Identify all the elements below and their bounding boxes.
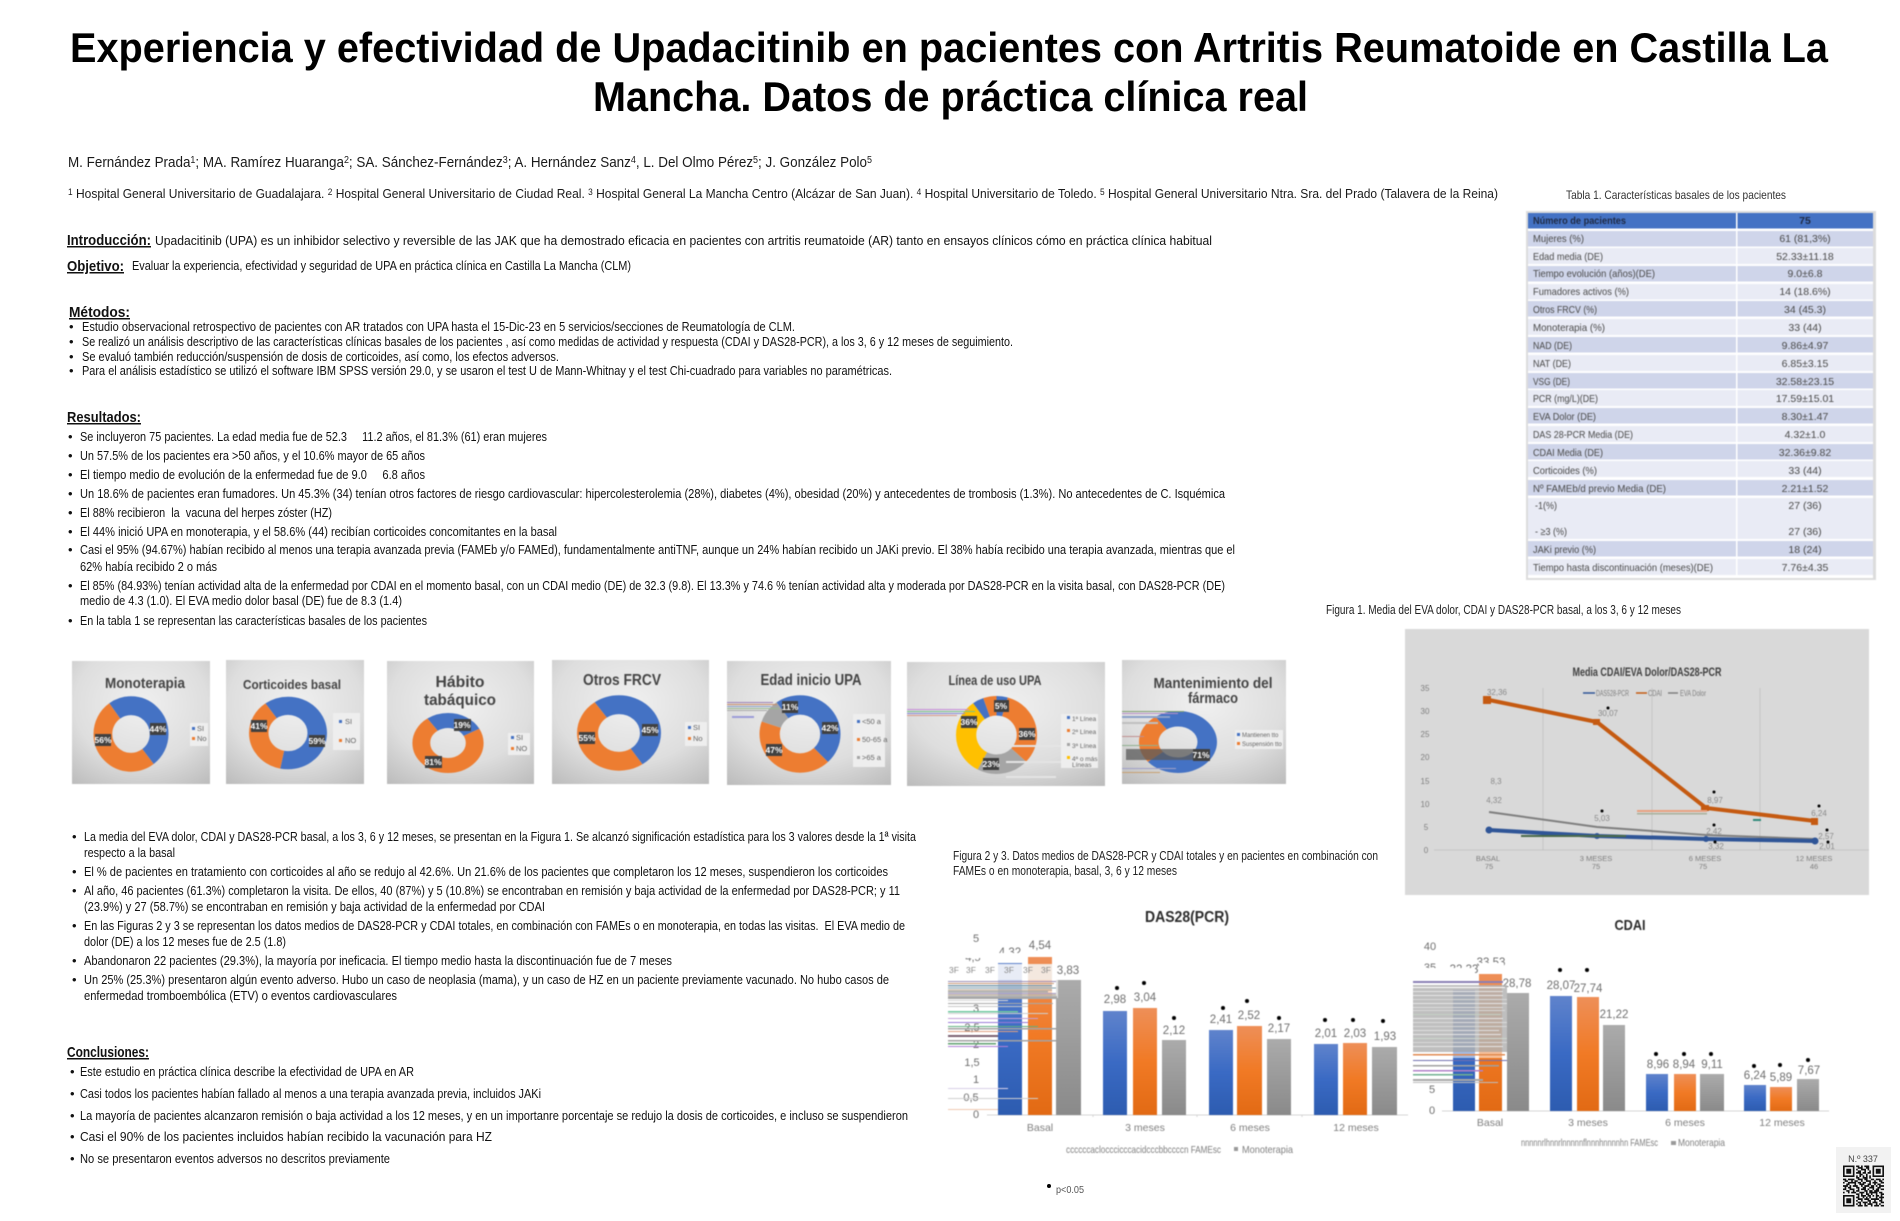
figure 2: DAS28 PCR bar chart: 2,17 — [1268, 1023, 1290, 1035]
introduction: Upadacitinib (UPA) es un inhibidor selectivo y reversible de las JAK que ha demostrado eficacia en pacientes con artritis reumatoide (AR) tanto en ensayos clínicos cómo en práctica clínica habitual — [155, 233, 1212, 248]
figure 1: line chart: 75 — [1592, 862, 1600, 871]
figure 2: DAS28 PCR bar chart: 3,83 — [1057, 965, 1079, 977]
figure 3: CDAI bar chart: 35 — [1424, 962, 1436, 974]
figure 2: DAS28 PCR bar chart: 2 — [973, 1039, 979, 1051]
figure 3: CDAI bar chart: 6,24 — [1744, 1070, 1767, 1082]
results text part 2: • — [72, 883, 77, 898]
figure 1: line chart: 2,42 — [1706, 827, 1722, 836]
table 1: baseline characteristics: Mujeres (%) — [1533, 233, 1584, 245]
figure 1 caption: Figura 1. Media del EVA dolor, CDAI y DAS28-PCR basal, a los 3, 6 y 12 meses — [1326, 603, 1681, 617]
figure 1: line chart: 20 — [1421, 753, 1430, 762]
figure 3: CDAI bar chart: 5,89 — [1770, 1072, 1792, 1084]
results text part 2: La media del EVA dolor, CDAI y DAS28-PCR basal, a los 3, 6 y 12 meses, se presentan en la Figura 1. Se alcanzó significación estadística para los 3 valores desde la 1ª visita — [84, 829, 917, 844]
donut chart: Línea de uso UPA: 36% — [960, 717, 978, 727]
figure 2 and 3 caption: FAMEs o en monoterapia, basal, 3, 6 y 12 meses — [953, 864, 1177, 878]
poster number and QR code — [1836, 1147, 1891, 1213]
results text part 1: 62% había recibido 2 o más — [80, 559, 217, 574]
results text part 2: Al año, 46 pacientes (61.3%) completaron la visita. De ellos, 40 (87%) y 5 (10.8%) se encontraban en remisión y baja actividad de la enfermedad por DAS28-PCR; y 11 — [84, 883, 900, 898]
figure 2: DAS28 PCR bar chart: 1,5 — [964, 1057, 980, 1069]
table 1: baseline characteristics: 8.30±1.47 — [1782, 411, 1828, 423]
donut chart: Línea de uso UPA: 3ª Línea — [1072, 743, 1096, 750]
table 1: baseline characteristics: 2.21±1.52 — [1782, 483, 1828, 495]
results text part 2: (23.9%) y 27 (58.7%) se encontraban en remisión y baja actividad de la enfermedad por CDAI — [84, 899, 545, 914]
table 1: baseline characteristics: 7.76±4.35 — [1782, 562, 1828, 574]
table 1: baseline characteristics: 75 — [1799, 215, 1811, 227]
results text part 1: • — [68, 448, 73, 463]
conclusions: Conclusiones: — [67, 1044, 149, 1061]
results text part 2: dolor (DE) a los 12 meses fue de 2.5 (1.8) — [84, 934, 286, 949]
figure 1: line chart: 0 — [1424, 846, 1429, 855]
results text part 1: • — [68, 486, 73, 501]
table 1: baseline characteristics: 34 (45.3) — [1784, 304, 1826, 316]
title: Experiencia y efectividad de Upadacitinib en pacientes con Artritis Reumatoide en Castilla La — [70, 24, 1829, 71]
figure 3: CDAI bar chart: 0 — [1429, 1105, 1435, 1117]
authors: 4 — [631, 155, 636, 166]
donut chart: Hábito tabáquico — [387, 661, 534, 784]
donut chart: Edad inicio UPA: >65 a — [862, 753, 882, 762]
donut chart: Monoterapia: No — [197, 734, 207, 743]
results text part 1: • — [68, 542, 73, 557]
results text part 2: Un 25% (25.3%) presentaron algún evento adverso. Hubo un caso de neoplasia (mama), y un caso de HZ en un paciente previamente vacunado. No hubo casos de — [84, 972, 889, 987]
DAS28 legend: ccccccaclocccicccacidcccbbccccn FAMEsc — [1066, 1144, 1221, 1156]
results text part 1: El 44% inició UPA en monoterapia, y el 58.6% (44) recibían corticoides concomitantes en la basal — [80, 524, 557, 539]
results text part 2: • — [72, 829, 77, 844]
donut chart: Edad inicio UPA: Edad inicio UPA — [760, 672, 862, 689]
methods: • — [69, 319, 74, 334]
conclusions: • — [70, 1064, 75, 1079]
table 1: baseline characteristics: 33 (44) — [1788, 322, 1822, 334]
figure 1: line chart: CDAI — [1648, 689, 1662, 698]
figure 3: CDAI bar chart: 32,33 — [1450, 964, 1478, 976]
figure 2 and 3 caption: Figura 2 y 3. Datos medios de DAS28-PCR y CDAI totales y en pacientes en combinación con — [953, 849, 1378, 863]
objective — [67, 258, 631, 275]
donut chart: Edad inicio UPA: 47% — [765, 745, 783, 755]
figure 2: DAS28 PCR bar chart: 4,32 — [999, 947, 1021, 959]
conclusions: • — [70, 1151, 75, 1166]
figure 1: line chart: 4,32 — [1486, 796, 1502, 805]
table 1: baseline characteristics: 32.58±23.15 — [1776, 376, 1834, 388]
figure 1: line chart: 8,97 — [1707, 796, 1723, 805]
affiliations: 5 — [1100, 187, 1105, 197]
introduction: Introducción: — [67, 232, 151, 249]
results text part 1: • — [68, 613, 73, 628]
results text part 1: • — [68, 505, 73, 520]
donut chart: Línea de uso UPA: 1ª Línea — [1072, 716, 1096, 723]
figure 2: DAS28 PCR bar chart: 3F — [1023, 965, 1033, 975]
title — [70, 24, 1829, 120]
affiliations: 2 — [328, 187, 332, 197]
figure 3: CDAI bar chart: 9,11 — [1701, 1059, 1723, 1071]
affiliations: 3 — [588, 187, 593, 197]
DAS28 bars — [998, 957, 1397, 1115]
donut chart: Monoterapia: SI — [197, 724, 204, 733]
table 1: baseline characteristics: 4.32±1.0 — [1785, 429, 1826, 441]
p-value note: p<0.05 — [1056, 1184, 1084, 1196]
figure 2: DAS28 PCR bar chart: 2,12 — [1163, 1025, 1185, 1037]
figure 2: DAS28 PCR bar chart — [948, 909, 1408, 1156]
figure 1: line chart: 2,57 — [1818, 832, 1834, 841]
donut chart: Línea de uso UPA: 23% — [982, 759, 1000, 769]
table 1: baseline characteristics: 9.86±4.97 — [1782, 340, 1828, 352]
affiliations: Hospital Universitario de Toledo. — [921, 186, 1100, 201]
objective: Evaluar la experiencia, efectividad y seguridad de UPA en práctica clínica en Castilla La Mancha (CLM) — [132, 258, 631, 273]
figure 1: line chart: 2,01 — [1819, 842, 1835, 851]
donut chart: Hábito tabáquico: tabáquico — [424, 692, 496, 709]
table 1: baseline characteristics: 52.33±11.18 — [1776, 251, 1834, 263]
figure 1: line chart: 3,32 — [1708, 842, 1724, 851]
CDAI bars — [1453, 974, 1819, 1111]
results text part 1: medio de 4.3 (1.0). El EVA medio dolor basal (DE) fue de 8.3 (1.4) — [80, 593, 402, 608]
authors: ; MA. Ramírez Huaranga — [195, 154, 345, 171]
conclusions: Casi el 90% de los pacientes incluidos habían recibido la vacunación para HZ — [80, 1129, 492, 1144]
donut chart: Monoterapia: 44% — [149, 724, 167, 734]
results text part 1: El 88% recibieron la vacuna del herpes zóster (HZ) — [80, 505, 332, 520]
results text part 2: • — [72, 972, 77, 987]
figure 2: DAS28 PCR bar chart: 3 meses — [1125, 1122, 1165, 1134]
figure 3: CDAI bar chart: 3 meses — [1568, 1117, 1608, 1129]
donut chart: Mantenimiento del fármaco: 71% — [1192, 750, 1210, 760]
authors: ; SA. Sánchez-Fernández — [349, 154, 503, 171]
figure 2: DAS28 PCR bar chart: 2,5 — [964, 1022, 980, 1034]
results text part 2: Abandonaron 22 pacientes (29.3%), la mayoría por ineficacia. El tiempo medio hasta la discontinuación fue de 7 meses — [84, 953, 672, 968]
figure 2: DAS28 PCR bar chart: 3F — [985, 965, 995, 975]
figure 2: DAS28 PCR bar chart: 3F — [1004, 965, 1014, 975]
results text part 1 — [67, 409, 1235, 628]
donut chart: Otros FRCV: 55% — [578, 733, 596, 743]
table 1: baseline characteristics: 14 (18.6%) — [1779, 286, 1831, 298]
figure 2: DAS28 PCR bar chart: 3F — [966, 965, 976, 975]
methods: Para el análisis estadístico se utilizó el software IBM SPSS versión 29.0, y se usaron el test U de Mann-Whitnay y el test Chi-cuadrado para variables no paramétricas. — [82, 363, 892, 378]
figure 3: CDAI bar chart: CDAI — [1614, 917, 1646, 934]
DAS28 legend: Monoterapia — [1242, 1144, 1293, 1156]
figure 1: line chart: 8,3 — [1490, 777, 1502, 786]
table 1: baseline characteristics: Corticoides (%) — [1533, 465, 1597, 477]
objective: Objetivo: — [67, 258, 124, 275]
affiliations: 1 — [68, 187, 73, 197]
figure 3: CDAI bar chart: 8,94 — [1673, 1059, 1696, 1071]
table 1: baseline characteristics: 17.59±15.01 — [1776, 393, 1834, 405]
donut chart: Línea de uso UPA: 36% — [1018, 729, 1036, 739]
figure 3: CDAI bar chart: 33,53 — [1477, 957, 1505, 969]
results text part 1: • — [68, 524, 73, 539]
table 1: baseline characteristics: Edad media (DE) — [1533, 251, 1603, 263]
table 1: baseline characteristics: Nº FAMEb/d previo Media (DE) — [1533, 483, 1666, 495]
donut chart: Monoterapia — [72, 661, 210, 784]
donut chart: Corticoides basal: 59% — [308, 736, 326, 746]
results text part 1: Resultados: — [67, 409, 141, 426]
table 1: baseline characteristics: 61 (81,3%) — [1779, 233, 1831, 245]
figure 2: DAS28 PCR bar chart: 1,93 — [1374, 1031, 1396, 1043]
title: Mancha. Datos de práctica clínica real — [593, 73, 1308, 120]
donut chart: Corticoides basal: NO — [345, 736, 356, 745]
donut chart: Hábito tabáquico: SI — [516, 733, 523, 742]
table 1: baseline characteristics: VSG (DE) — [1533, 376, 1570, 388]
conclusions — [67, 1044, 908, 1166]
donut chart: Línea de uso UPA: 2ª Línea — [1072, 729, 1096, 736]
CDAI legend: nnnnnrlhnnrlnnnnnflnnnhnnnnhn FAMEsc — [1521, 1137, 1658, 1149]
figure 2: DAS28 PCR bar chart: DAS28(PCR) — [1145, 909, 1229, 926]
figure 2: DAS28 PCR bar chart: 12 meses — [1333, 1122, 1379, 1134]
donut chart: Línea de uso UPA: Línea de uso UPA — [948, 673, 1042, 688]
authors: ; J. González Polo — [758, 154, 867, 171]
figure 3: CDAI bar chart: 7,67 — [1798, 1065, 1820, 1077]
figure 1: line chart: 5 — [1424, 823, 1429, 832]
donut chart: Hábito tabáquico: 81% — [424, 757, 442, 767]
figure 3: CDAI bar chart: 40 — [1424, 941, 1436, 953]
figure 3: CDAI bar chart: 8,96 — [1647, 1059, 1669, 1071]
table 1: baseline characteristics: DAS 28-PCR Media (DE) — [1533, 429, 1633, 441]
donut chart: Mantenimiento del fármaco: Suspensión tto — [1242, 742, 1282, 748]
donut chart: Otros FRCV: Otros FRCV — [583, 672, 662, 689]
figure 1: line chart: 46 — [1810, 862, 1818, 871]
donut chart: Otros FRCV: No — [693, 734, 703, 743]
figure 2 and 3 caption — [953, 849, 1378, 878]
table 1: baseline characteristics: 9.0±6.8 — [1788, 268, 1823, 280]
donut chart: Línea de uso UPA — [907, 662, 1105, 786]
donut chart: Edad inicio UPA: 11% — [782, 702, 799, 712]
results text part 1: • — [68, 578, 73, 593]
methods: Se realizó un análisis descriptivo de las características clínicas basales de los pacientes , así como medidas de actividad y respuesta (CDAI y DAS28-PCR), a los 3, 6 y 12 meses de seguimiento. — [82, 334, 1013, 349]
table 1: baseline characteristics: Número de pacientes — [1533, 215, 1626, 227]
methods: Métodos: — [69, 304, 130, 321]
conclusions: • — [70, 1108, 75, 1123]
donut chart: Monoterapia: 56% — [94, 735, 112, 745]
CDAI legend: Monoterapia — [1678, 1137, 1725, 1149]
results text part 1: Se incluyeron 75 pacientes. La edad media fue de 52.3 11.2 años, el 81.3% (61) eran mujeres — [80, 429, 547, 444]
authors: 1 — [190, 155, 196, 166]
conclusions: Casi todos los pacientes habían fallado al menos a una terapia avanzada previa, incluidos JAKi — [80, 1086, 541, 1101]
figure 2: DAS28 PCR bar chart: 2,98 — [1104, 994, 1126, 1006]
donut chart: Corticoides basal — [226, 660, 364, 784]
figure 1: line chart: 6 MESES — [1689, 854, 1721, 863]
results text part 1: • — [68, 467, 73, 482]
donut chart: Otros FRCV: SI — [693, 723, 700, 732]
authors: , L. Del Olmo Pérez — [636, 154, 753, 171]
table caption: Tabla 1. Características basales de los pacientes — [1566, 188, 1786, 202]
figure 1: line chart: 12 MESES — [1796, 854, 1832, 863]
results text part 1: Casi el 95% (94.67%) habían recibido al menos una terapia avanzada previa (FAMEb y/o FAMEd), fundamentalmente antiTNF, aunque un 24% habían recibido un JAKi previo. El 38% había recibido una terapia avanzada, mientras que el — [80, 542, 1235, 557]
CDAI compression artefact stripes — [1413, 963, 1507, 1083]
figure 1: line chart: 75 — [1485, 862, 1493, 871]
results text part 2: El % de pacientes en tratamiento con corticoides al año se redujo al 42.6%. Un 21.6% de los pacientes que completaron los 12 meses, suspendieron los corticoides — [84, 864, 888, 879]
figure 2: DAS28 PCR bar chart: 3F — [949, 965, 959, 975]
results text part 1: Un 57.5% de los pacientes era >50 años, y el 10.6% mayor de 65 años — [80, 448, 425, 463]
donut chart: Edad inicio UPA: 50-65 a — [862, 735, 888, 744]
conclusions: No se presentaron eventos adversos no descritos previamente — [80, 1151, 390, 1166]
results text part 1: El 85% (84.93%) tenían actividad alta de la enfermedad por CDAI en el momento basal, con un CDAI medio (DE) de 32.3 (9.8). El 13.3% y 74.6 % tenían actividad alta y moderada por DAS28-PCR en la visita basal, con DAS28-PCR (DE) — [80, 578, 1225, 593]
figure 1: line chart: 5,03 — [1594, 814, 1610, 823]
table 1: baseline characteristics: - ≥3 (%) — [1535, 526, 1567, 538]
table 1: baseline characteristics: -1(%) — [1535, 500, 1557, 512]
results text part 2: • — [72, 864, 77, 879]
figure 1: line chart: 3 MESES — [1580, 854, 1612, 863]
affiliations: 4 — [917, 187, 921, 197]
conclusions: • — [70, 1129, 75, 1144]
figure 2: DAS28 PCR bar chart: 0 — [973, 1109, 979, 1121]
donut chart: Otros FRCV: 45% — [641, 725, 659, 735]
donut chart: Mantenimiento del fármaco: fármaco — [1188, 691, 1238, 707]
donut chart: Mantenimiento del fármaco: Mantienen tto — [1242, 733, 1279, 739]
conclusions: • — [70, 1086, 75, 1101]
table 1: baseline characteristics — [1526, 211, 1876, 580]
authors: M. Fernández Prada — [68, 154, 205, 171]
conclusions: La mayoría de pacientes alcanzaron remisión o baja actividad a los 12 meses, y en un importanre porcentaje se redujo la dosis de corticoides, e incluso se suspendieron — [80, 1108, 908, 1123]
table 1: baseline characteristics: 32.36±9.82 — [1779, 447, 1831, 459]
figure 1: line chart: 75 — [1699, 862, 1707, 871]
table 1: baseline characteristics: 6.85±3.15 — [1782, 358, 1828, 370]
affiliations: Hospital General La Mancha Centro (Alcázar de San Juan). — [593, 186, 917, 201]
figure 1: line chart: 10 — [1421, 800, 1430, 809]
DAS28 compression artefact stripes — [948, 953, 1058, 1110]
table 1: baseline characteristics: Otros FRCV (%) — [1533, 304, 1597, 316]
figure 3: CDAI bar chart: 28,07 — [1547, 980, 1575, 992]
results text part 2: enfermedad tromboembólica (ETV) o eventos cardiovasculares — [84, 988, 397, 1003]
figure 3: CDAI bar chart: 6 meses — [1665, 1117, 1705, 1129]
figure 2: DAS28 PCR bar chart: 3F — [1041, 965, 1051, 975]
affiliations: Hospital General Universitario de Guadalajara. — [73, 186, 328, 201]
donut chart: Línea de uso UPA: 5% — [995, 701, 1008, 711]
methods: • — [69, 334, 74, 349]
donut chart: Otros FRCV — [552, 660, 709, 784]
figure 1: line chart: 6,24 — [1811, 809, 1827, 818]
figure 2: DAS28 PCR bar chart: 3 — [973, 1003, 979, 1015]
table 1: baseline characteristics: JAKi previo (%) — [1533, 544, 1596, 556]
figure 3: CDAI bar chart: 5 — [1429, 1084, 1435, 1096]
figure 3: CDAI bar chart — [1413, 917, 1829, 1149]
table 1: baseline characteristics: 33 (44) — [1788, 465, 1822, 477]
donut chart: Edad inicio UPA: 42% — [821, 723, 839, 733]
results text part 1: En la tabla 1 se representan las características basales de los pacientes — [80, 613, 427, 628]
results text part 2: • — [72, 918, 77, 933]
methods: • — [69, 349, 74, 364]
figure 2: DAS28 PCR bar chart: 2,41 — [1210, 1014, 1232, 1026]
donut chart: Línea de uso UPA: 4ª o más — [1072, 756, 1098, 763]
methods: Se evaluó también reducción/suspensión de dosis de corticoides, así como, los efectos adversos. — [82, 349, 559, 364]
donut chart: Hábito tabáquico: Hábito — [436, 674, 484, 691]
figure 3: CDAI bar chart: Basal — [1477, 1117, 1503, 1129]
figure 2: DAS28 PCR bar chart: 1 — [973, 1074, 979, 1086]
figure 1: line chart — [1405, 629, 1869, 895]
donut chart: Monoterapia: Monoterapia — [105, 675, 186, 692]
table 1: baseline characteristics: Fumadores activos (%) — [1533, 286, 1629, 298]
series: EVA dolor — [1489, 812, 1815, 839]
table 1: baseline characteristics: EVA Dolor (DE) — [1533, 411, 1596, 423]
figure 2: DAS28 PCR bar chart: 0,5 — [963, 1092, 979, 1104]
figure 1: line chart: Media CDAI/EVA Dolor/DAS28-PCR — [1572, 667, 1722, 679]
table 1: baseline characteristics: Tiempo hasta discontinuación (meses)(DE) — [1533, 562, 1713, 574]
donut chart: Hábito tabáquico: NO — [516, 744, 527, 753]
donut chart: Línea de uso UPA: Líneas — [1072, 762, 1092, 769]
methods: Estudio observacional retrospectivo de pacientes con AR tratados con UPA hasta el 15-Dic-23 en 5 servicios/secciones de Reumatología de CLM. — [82, 319, 795, 334]
donut chart: Corticoides basal: 41% — [250, 721, 268, 731]
authors: 3 — [503, 155, 508, 166]
figure 1: line chart: 35 — [1421, 684, 1430, 693]
table 1: baseline characteristics: NAT (DE) — [1533, 358, 1571, 370]
figure 3: CDAI bar chart: 27,74 — [1574, 983, 1603, 995]
series: CDAI — [1483, 696, 1818, 825]
authors: 5 — [867, 155, 872, 166]
table 1: baseline characteristics: NAD (DE) — [1533, 340, 1572, 352]
table 1: baseline characteristics: 18 (24) — [1788, 544, 1822, 556]
figure 3: CDAI bar chart: 21,22 — [1600, 1009, 1628, 1021]
figure 2: DAS28 PCR bar chart: 3,04 — [1134, 992, 1157, 1004]
table 1: baseline characteristics: 27 (36) — [1788, 500, 1822, 512]
figure 1: line chart: DAS528-PCR — [1596, 689, 1629, 698]
figure 2: DAS28 PCR bar chart: 4,54 — [1029, 940, 1052, 952]
results text part 2: En las Figuras 2 y 3 se representan los datos medios de DAS28-PCR y CDAI totales, en combinación con FAMEs o en monoterapia, en todas las visitas. El EVA medio de — [84, 918, 905, 933]
conclusions: Este estudio en práctica clínica describe la efectividad de UPA en AR — [80, 1064, 414, 1079]
donut chart: Mantenimiento del fármaco — [1122, 660, 1286, 784]
figure 2: DAS28 PCR bar chart: 2,03 — [1344, 1028, 1366, 1040]
authors: 5 — [753, 155, 758, 166]
donut chart: Corticoides basal: Corticoides basal — [243, 677, 341, 692]
results text part 2: • — [72, 953, 77, 968]
figure 2: DAS28 PCR bar chart: Basal — [1027, 1122, 1053, 1134]
figure 2: DAS28 PCR bar chart: 4,5 — [965, 952, 981, 964]
icon: QR code — [1843, 1166, 1884, 1206]
methods: • — [69, 363, 74, 378]
figure 3: CDAI bar chart: 28,78 — [1503, 978, 1531, 990]
table 1: baseline characteristics: 27 (36) — [1788, 526, 1822, 538]
figure 2: DAS28 PCR bar chart: 6 meses — [1230, 1122, 1270, 1134]
series: DAS28-PCR — [1486, 826, 1818, 844]
table 1: baseline characteristics: CDAI Media (DE) — [1533, 447, 1603, 459]
figure 3: CDAI bar chart: 12 meses — [1759, 1117, 1805, 1129]
methods — [69, 304, 1013, 378]
authors: 2 — [344, 155, 349, 166]
table 1: baseline characteristics: Monoterapia (%) — [1533, 322, 1605, 334]
p-value note — [1047, 1184, 1084, 1196]
donut chart: Edad inicio UPA — [727, 661, 891, 785]
table 1: baseline characteristics: PCR (mg/L)(DE) — [1533, 393, 1598, 405]
poster number and QR code: N.º 337 — [1848, 1154, 1878, 1164]
results text part 2: respecto a la basal — [84, 845, 175, 860]
donut chart: Hábito tabáquico: 19% — [453, 720, 471, 730]
donut chart: Mantenimiento del fármaco: Mantenimiento del — [1154, 676, 1272, 692]
results text part 1: Un 18.6% de pacientes eran fumadores. Un 45.3% (34) tenían otros factores de riesgo cardiovascular: hipercolesterolemia (28%), diabetes (4%), obesidad (20%) y antecedentes de trombosis (1.3%). No antecedentes de C. Isquémica — [80, 486, 1226, 501]
donut chart: Corticoides basal: SI — [345, 717, 352, 726]
results text part 1: El tiempo medio de evolución de la enfermedad fue de 9.0 6.8 años — [80, 467, 425, 482]
donut chart: Edad inicio UPA: <50 a — [862, 717, 882, 726]
authors: ; A. Hernández Sanz — [508, 154, 631, 171]
table 1: baseline characteristics: Tiempo evolución (años)(DE) — [1533, 268, 1655, 280]
figure 1: line chart: 30 — [1421, 707, 1430, 716]
results text part 2 — [72, 829, 917, 1003]
affiliations: Hospital General Universitario de Ciudad Real. — [332, 186, 588, 201]
figure 1: line chart: 25 — [1421, 730, 1430, 739]
figure 2: DAS28 PCR bar chart: 2,01 — [1315, 1028, 1337, 1040]
affiliations: Hospital General Universitario Ntra. Sra. del Prado (Talavera de la Reina) — [1105, 186, 1498, 201]
figure 1: line chart: EVA Dolor — [1680, 689, 1706, 698]
figure 1: line chart: 30,07 — [1598, 709, 1619, 718]
figure 1: line chart: 15 — [1421, 777, 1430, 786]
figure 1: line chart: 32,36 — [1487, 688, 1508, 697]
figure 1: line chart: BASAL — [1476, 854, 1500, 863]
figure 2: DAS28 PCR bar chart: 2,52 — [1238, 1010, 1260, 1022]
results text part 1: • — [68, 429, 73, 444]
figure 2: DAS28 PCR bar chart: 5 — [973, 933, 979, 945]
